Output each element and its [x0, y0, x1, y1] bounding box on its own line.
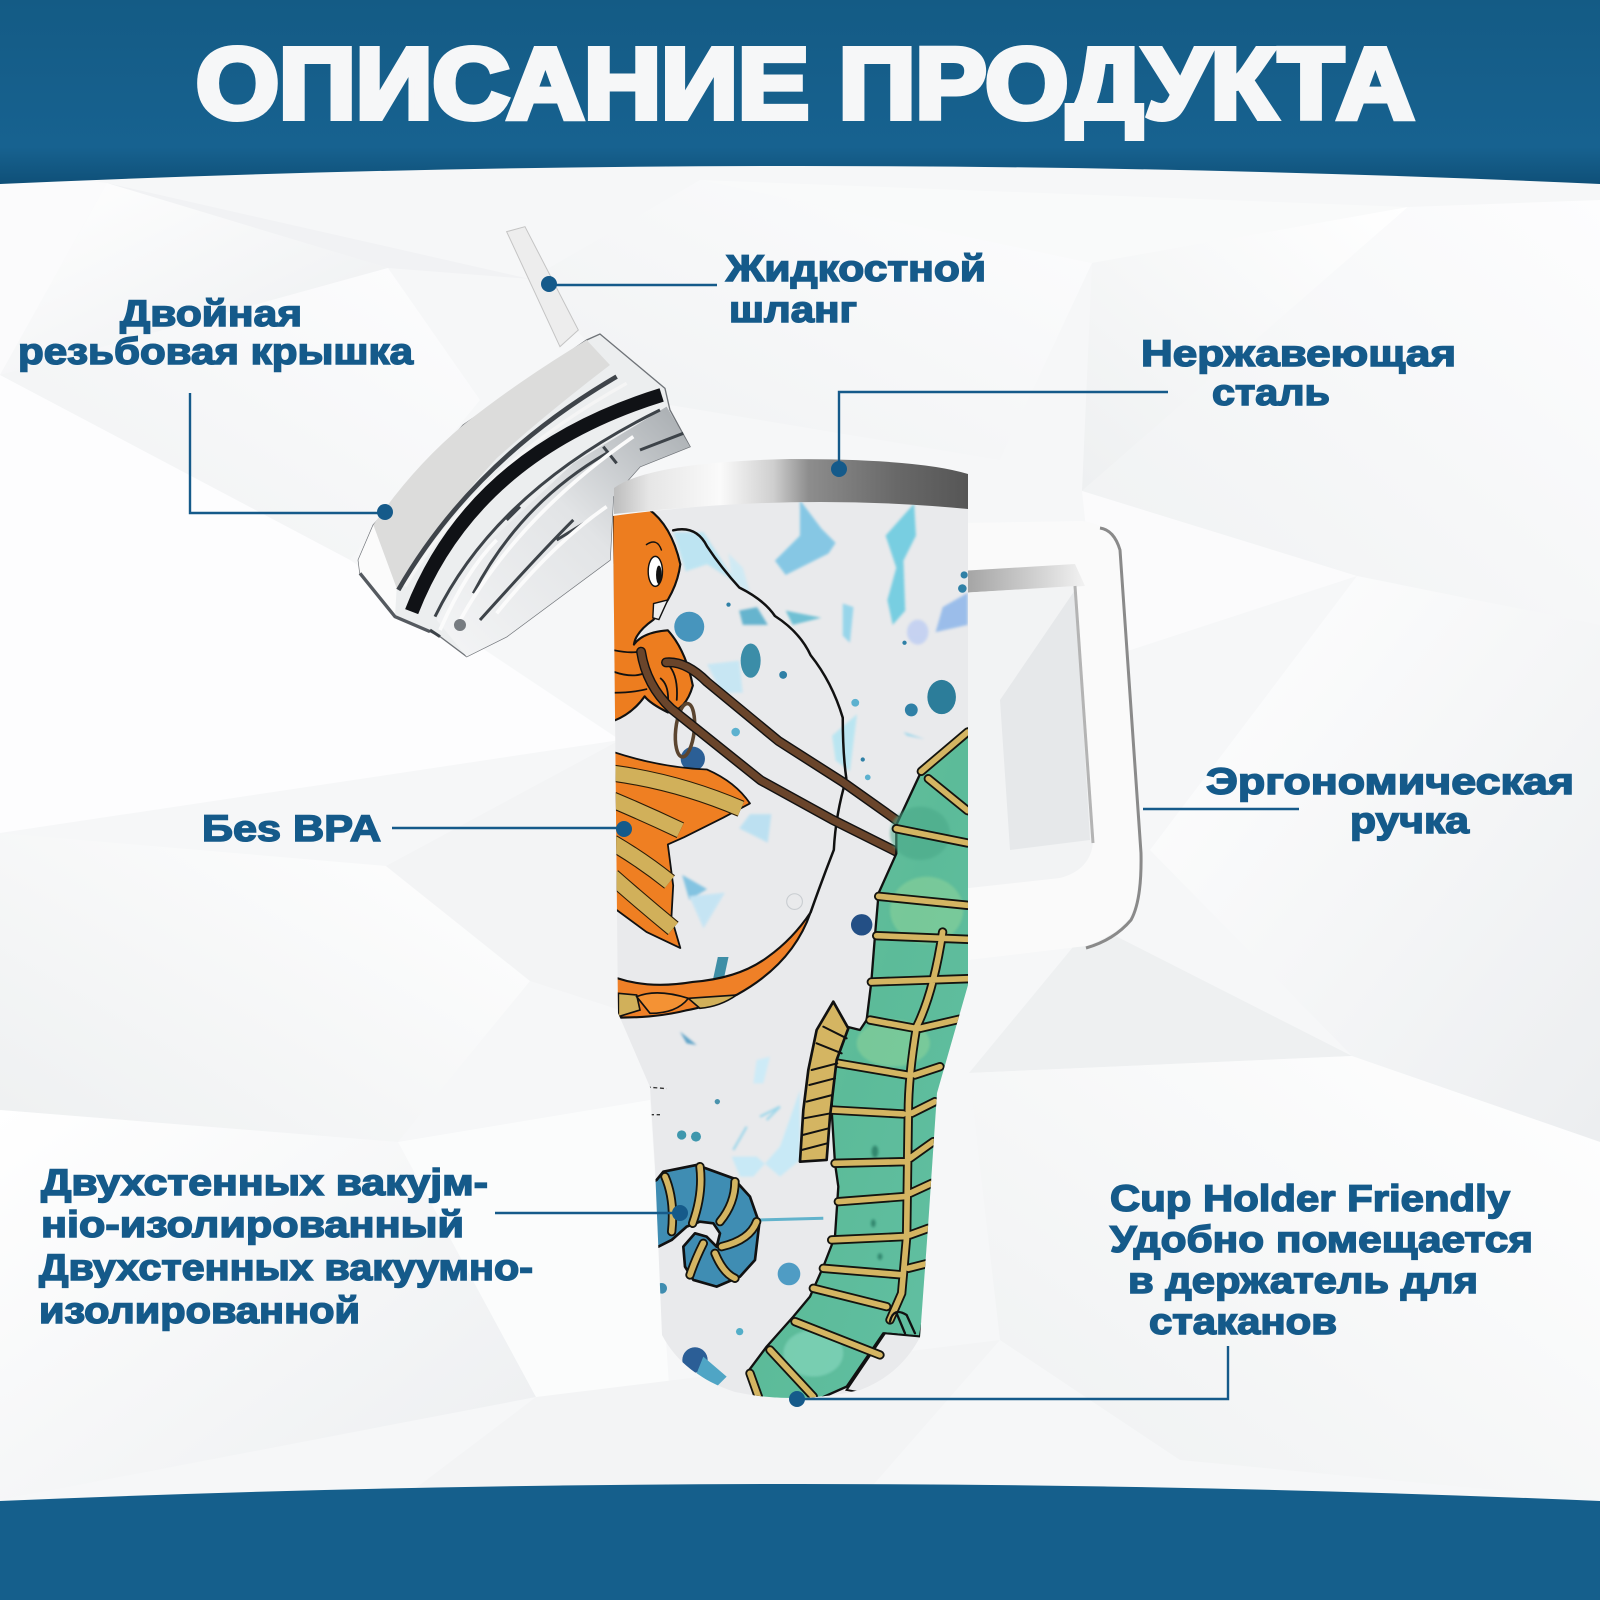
callout: vacuum insulated: Двухстенных вакуумно-	[39, 1247, 533, 1288]
icon: open tumbler lid with straw	[358, 227, 690, 657]
callout: cup holder friendly: в держатель для	[1128, 1260, 1478, 1301]
callout: stainless steel: сталь	[1212, 372, 1330, 413]
watercolor splashes	[673, 500, 968, 928]
lighter body paper at tail end	[845, 1332, 920, 1392]
upper illustration	[612, 500, 971, 1018]
callout: ergonomic handle: Эргономическая	[1206, 761, 1574, 802]
seahorse gold stripes	[750, 732, 968, 1397]
thread streaks	[430, 410, 683, 637]
seahorse body	[747, 727, 970, 1400]
orange fin	[612, 752, 750, 948]
octopus eye	[648, 556, 662, 586]
footer band	[0, 1484, 1600, 1600]
lid rim highlight	[358, 525, 397, 617]
fin gold stripes	[612, 773, 741, 928]
handle opening	[960, 586, 1093, 889]
orange octopus	[612, 509, 693, 721]
clear threaded part	[437, 407, 690, 657]
straw	[507, 227, 578, 347]
handle inner shadow band	[960, 564, 1085, 593]
callout: ergonomic handle: ручка	[1350, 800, 1469, 841]
callout: vacuum insulated: изолированной	[39, 1290, 360, 1331]
ring and cords	[673, 703, 697, 758]
callout: lid: резьбовая крышка	[18, 331, 413, 372]
seahorse watercolor variation	[783, 807, 963, 1377]
seahorse tail curl	[890, 1312, 915, 1333]
callout: cup holder friendly: Удобно помещается	[1110, 1219, 1533, 1260]
tumbler handle	[960, 521, 1141, 961]
callout: stainless steel	[831, 333, 1456, 477]
tumbler body with illustration	[600, 490, 980, 1410]
dorsal fin	[800, 1002, 848, 1162]
handle outer	[960, 521, 1139, 961]
callout: BPA free	[202, 808, 632, 849]
callout: lid: Двойная	[120, 293, 302, 334]
callout: lid	[18, 293, 413, 520]
callout: straw: Жидкостной	[725, 248, 986, 289]
shell gold bands	[665, 1167, 757, 1278]
callout: cup holder friendly: Cup Holder Friendly	[1110, 1178, 1510, 1219]
orange tail	[612, 912, 811, 1018]
header band	[0, 0, 1600, 184]
tiny ink marks	[647, 1087, 667, 1115]
body paper	[600, 490, 980, 1410]
callout: stainless steel: Нержавеющая	[1141, 333, 1456, 374]
handle edge shadow	[1086, 528, 1141, 948]
tumbler steel rim	[614, 459, 968, 514]
title: ОПИСАНИЕ ПРОДУКТА	[196, 28, 1414, 140]
callout: vacuum insulated: Двухстенных вакуjм-	[41, 1162, 488, 1203]
rim dark reflections	[398, 377, 617, 590]
blue shell	[650, 1165, 759, 1287]
callout: cup holder friendly: стаканов	[1149, 1301, 1337, 1342]
lid body	[358, 334, 690, 657]
callout: straw: шланг	[729, 289, 857, 330]
lid top face	[373, 340, 610, 588]
callout: vacuum insulated	[39, 1162, 688, 1331]
callout: ergonomic handle	[1143, 761, 1574, 841]
dark splatter dots	[674, 571, 968, 982]
seahorse and shell	[618, 727, 970, 1403]
light splashes	[680, 1032, 800, 1177]
black seal	[412, 395, 662, 612]
wavy outline	[673, 529, 846, 912]
callout: cup holder friendly	[789, 1178, 1533, 1407]
callout: BPA free: Бes BPA	[202, 808, 381, 849]
callout: vacuum insulated: нio-изолированный	[41, 1204, 464, 1245]
callout: straw	[541, 248, 986, 330]
